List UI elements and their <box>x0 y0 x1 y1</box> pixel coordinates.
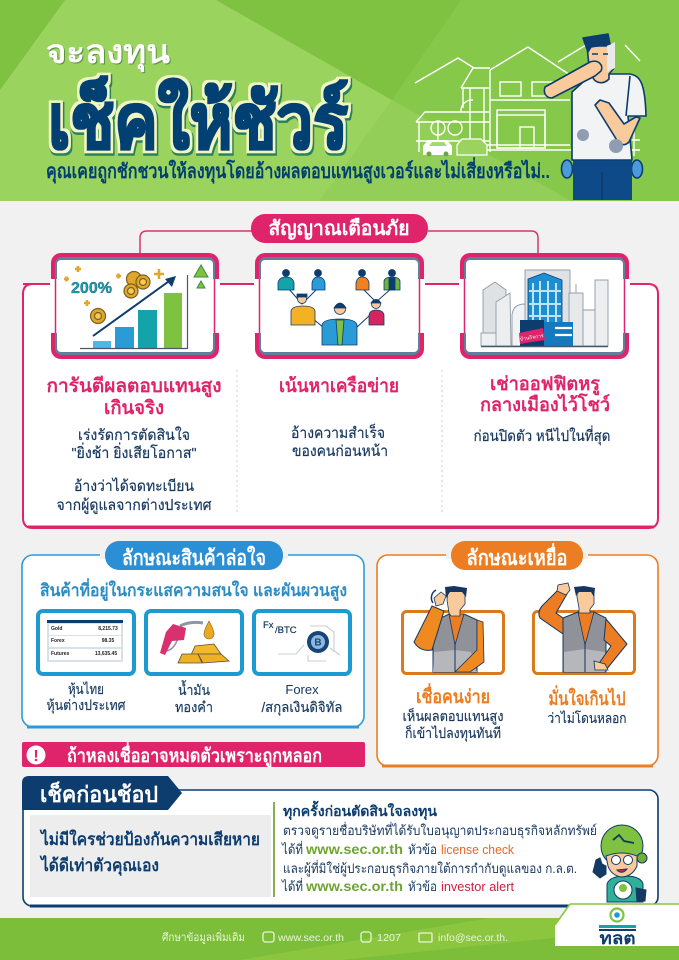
product labels: ทองคำ <box>175 699 213 715</box>
heading pill: สัญญาณเตือนภัย <box>268 217 410 240</box>
card: forex and crypto <box>254 611 350 674</box>
advice text: www.sec.or.th <box>305 878 403 894</box>
figure: overconfident man <box>534 583 634 674</box>
icon: house outline <box>415 45 640 156</box>
card: stocks: Gold <box>51 626 62 632</box>
network lines <box>288 288 392 328</box>
advice text: ตรวจดูรายชื่อบริษัทที่ได้รับใบอนุญาตประกอบธุรกิจหลักทรัพย์ <box>283 822 597 839</box>
tab heading: เช็คก่อนช้อป <box>40 780 158 807</box>
advice text: และผู้ที่มิใช่ผู้ประกอบธุรกิจภายใต้การกำกับดูแลของ ก.ล.ต. <box>283 860 577 877</box>
product labels: /สกุลเงินดิจิทัล <box>262 699 342 716</box>
icon: coins <box>90 272 150 324</box>
trait 1 text: เห็นผลตอบแทนสูง <box>402 707 504 725</box>
advice text: ได้ที่ <box>281 841 303 857</box>
slogan box <box>30 815 271 897</box>
hair <box>583 34 610 52</box>
footer contact text: ศึกษาข้อมูลเพิ่มเติม <box>162 929 245 944</box>
card: stocks: 98.35 <box>102 638 114 644</box>
warning banner: ! <box>33 748 39 765</box>
trait 1 text: ก็เข้าไปลงทุนทันที <box>405 724 501 742</box>
icon: shirt stains <box>577 129 623 153</box>
column 2 text: เน้นหาเครือข่าย <box>279 375 399 397</box>
footer contact text <box>162 929 508 944</box>
column 1 text: อ้างว่าได้จดทะเบียน <box>74 477 194 495</box>
heading pill <box>100 541 288 570</box>
card: forex and crypto: Fx <box>263 620 274 631</box>
icon: worried man <box>544 34 646 200</box>
trousers <box>573 160 632 200</box>
advice text <box>281 800 597 894</box>
column 2 text: อ้างความสำเร็จ <box>291 423 385 442</box>
raised arm <box>544 61 602 98</box>
trait 1 text: เชื่อคนง่าย <box>416 683 490 708</box>
advice text: ได้ที่ <box>281 878 303 894</box>
panel background <box>0 201 679 918</box>
icon: main blue tower <box>520 273 573 346</box>
trait 2 text <box>548 685 626 726</box>
product labels: Forex <box>285 682 319 697</box>
column 1 text <box>46 375 222 514</box>
column 3 text <box>474 374 610 446</box>
panel: warning signs <box>23 214 658 528</box>
label: 200%: 200% <box>71 280 112 297</box>
panel: victim traits <box>377 541 658 766</box>
advice text: investor alert <box>441 879 514 894</box>
column 3 text: เช่าออฟฟิตหรู <box>490 374 601 396</box>
column 2 text <box>279 375 399 460</box>
trait 1 text <box>402 683 504 742</box>
column 1 text: การันตีผลตอบแทนสูง <box>46 375 222 398</box>
icon: mascot <box>593 825 647 902</box>
trait 2 text: มั่นใจเกินไป <box>548 685 626 710</box>
card: forex and crypto: /BTC <box>275 625 297 636</box>
header title small: จะลงทุน <box>46 33 170 73</box>
heading pill <box>251 214 428 243</box>
card: stocks: 8,215.73 <box>98 626 118 632</box>
product labels: หุ้นต่างประเทศ <box>46 697 126 714</box>
trait 2 text: ว่าไม่โดนหลอก <box>548 710 626 726</box>
advice text: หัวข้อ <box>408 879 437 894</box>
product labels <box>46 680 342 716</box>
card: stocks: 13,635.45 <box>95 651 117 657</box>
card: guaranteed returns <box>50 253 220 359</box>
slogan box: ไม่มีใครช่วยป้องกันความเสียหาย <box>39 829 260 849</box>
shirt <box>572 74 646 160</box>
warning banner <box>22 742 365 768</box>
tab heading <box>22 776 182 810</box>
figure: gullible man <box>402 586 504 674</box>
card: stocks: Futures <box>51 651 70 657</box>
column 1 text: "ยิ่งช้า ยิ่งเสียโอกาส" <box>72 442 196 462</box>
folded arm <box>595 100 640 145</box>
icon: cars <box>423 139 487 156</box>
dashed dividers <box>237 370 442 512</box>
header subtitle: คุณเคยถูกชักชวนให้ลงทุนโดยอ้างผลตอบแทนสูงเวอร์และไม่เสี่ยงหรือไม่.. <box>46 156 550 185</box>
footer <box>0 904 679 960</box>
neck and face <box>587 46 614 83</box>
connector lines <box>140 231 538 255</box>
card: stocks: Forex <box>51 638 65 644</box>
logo: ทลต <box>600 929 636 948</box>
column 3 text: ก่อนปิดตัว หนีไปในที่สุด <box>474 425 610 446</box>
bar chart <box>80 265 208 349</box>
sign <box>519 328 545 344</box>
logo <box>555 904 679 948</box>
card: office <box>459 253 630 359</box>
heading pill: ลักษณะสินค้าล่อใจ <box>122 545 266 570</box>
header title large: เช็คให้ชัวร์ <box>48 76 348 165</box>
card: forex and crypto: B <box>314 638 322 648</box>
panel outline <box>23 284 658 528</box>
icon: people network <box>278 270 400 345</box>
subheading: สินค้าที่อยู่ในกระแสความสนใจ และผันผวนสูง <box>40 578 347 602</box>
column 1 text: เกินจริง <box>104 398 164 419</box>
slogan box: ได้ดีเท่าตัวคุณเอง <box>39 855 159 876</box>
advice text: www.sec.or.th <box>305 841 403 857</box>
column 2 text: ของคนก่อนหน้า <box>292 443 388 460</box>
column 3 text: กลางเมืองไว้โชว์ <box>480 393 610 416</box>
heading pill <box>446 541 588 570</box>
advice text: หัวข้อ <box>408 842 437 857</box>
icon: city buildings <box>481 270 608 346</box>
icon: plus signs <box>64 266 164 306</box>
card: stocks <box>38 611 134 674</box>
footer contact text: www.sec.or.th <box>277 933 344 944</box>
warning banner: ถ้าหลงเชื่ออาจหมดตัวเพราะถูกหลอก <box>67 742 322 768</box>
product labels: น้ำมัน <box>178 680 210 698</box>
column 1 text: เร่งรัดการตัดสินใจ <box>78 426 190 444</box>
heading pill: ลักษณะเหยื่อ <box>466 542 568 570</box>
card: oil and gold <box>146 611 242 674</box>
panel: attractive products <box>22 541 364 727</box>
column 1 text: จากผู้ดูแลจากต่างประเทศ <box>56 497 212 514</box>
advice text: ทุกครั้งก่อนตัดสินใจลงทุน <box>283 800 437 820</box>
footer contact text: info@sec.or.th. <box>438 933 508 944</box>
card: network <box>254 253 425 359</box>
advice text: license check <box>441 842 514 857</box>
sign: บ้านกิจการ <box>519 332 544 343</box>
pockets <box>562 160 572 178</box>
footer contact text: 1207 <box>377 933 401 944</box>
product labels: หุ้นไทย <box>68 681 104 698</box>
panel: check before shopping <box>22 776 658 906</box>
